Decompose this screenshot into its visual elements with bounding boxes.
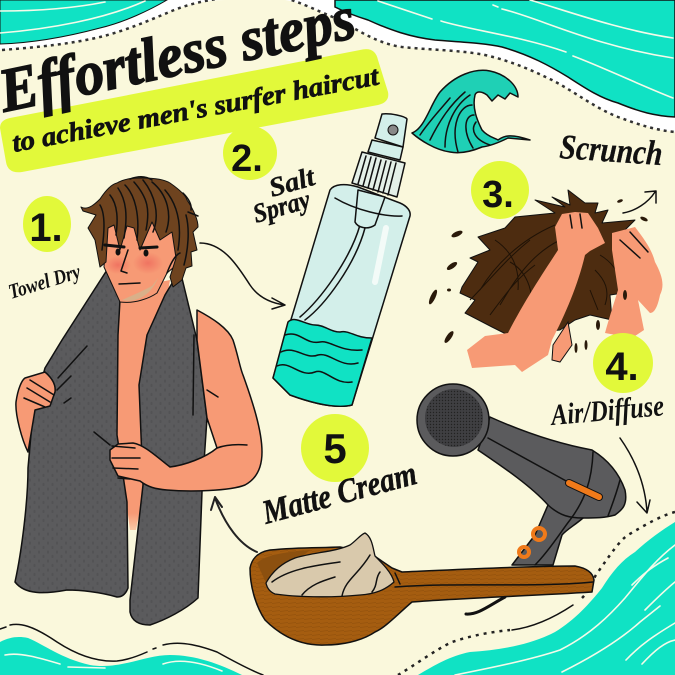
subtitle banner [0, 49, 388, 172]
arm right [605, 227, 662, 338]
cream [266, 533, 394, 597]
wooden spoon with cream [250, 533, 594, 645]
hair dryer [417, 384, 626, 614]
label: salt spray [249, 161, 319, 229]
bottle body [273, 185, 410, 406]
head [417, 384, 489, 456]
arm left [467, 212, 605, 372]
step 4 badge [593, 333, 653, 393]
arrow: step 5 to man [211, 497, 257, 552]
ear [552, 322, 572, 362]
right arm, shoulder and hand [110, 310, 262, 491]
blush [105, 256, 131, 274]
arrow: step 4 to shore [620, 438, 650, 513]
step 5 badge: 5 [323, 425, 347, 472]
orange switch [569, 483, 599, 497]
drops [427, 199, 648, 353]
ribbed collar [352, 152, 405, 197]
wave icon [412, 70, 530, 153]
head with scrunched hair [427, 190, 662, 372]
bottom left shoreline [0, 624, 263, 675]
step 1 badge [23, 196, 71, 252]
towel right [130, 270, 207, 625]
neck [355, 190, 385, 228]
left hand [16, 372, 55, 452]
nozzle [368, 140, 403, 160]
label: salt spray: Salt [265, 161, 319, 203]
orange knobs [533, 528, 545, 540]
body [478, 417, 626, 565]
label: salt spray: Spray [249, 184, 314, 229]
neck [118, 280, 170, 340]
dip tube [300, 225, 365, 320]
subtitle: to achieve men's surfer haircut [10, 60, 382, 158]
ear [167, 253, 180, 273]
water [273, 320, 372, 406]
bowl interior [257, 550, 310, 585]
hair [81, 178, 198, 287]
step 2 badge: 2. [231, 138, 263, 180]
torso [116, 290, 165, 530]
hair mass [460, 190, 640, 335]
arrow: step 1 to step 2 [200, 243, 285, 309]
blush right [133, 252, 163, 274]
step 3 badge [471, 161, 529, 219]
label: towel dry: Towel Dry [5, 259, 84, 304]
top shoreline [0, 0, 675, 132]
spray bottle [273, 114, 410, 406]
finger lines [570, 214, 648, 258]
arrow: scrunch [623, 191, 656, 213]
stubble [122, 278, 158, 301]
man with towel [15, 177, 262, 625]
step 5 badge [301, 414, 369, 482]
nose and mouth [119, 250, 140, 284]
label: matte cream: Matte Cream [258, 455, 421, 532]
step 2 badge [223, 126, 277, 180]
stray hair [130, 177, 198, 216]
step 1 badge: 1. [29, 206, 63, 250]
bottom right shoreline [398, 512, 675, 675]
eyes and brows [105, 245, 157, 248]
face [104, 213, 180, 302]
towel left [15, 270, 128, 597]
highlight [375, 228, 386, 282]
step 3 badge: 3. [482, 174, 514, 216]
step 4 badge: 4. [605, 345, 639, 389]
